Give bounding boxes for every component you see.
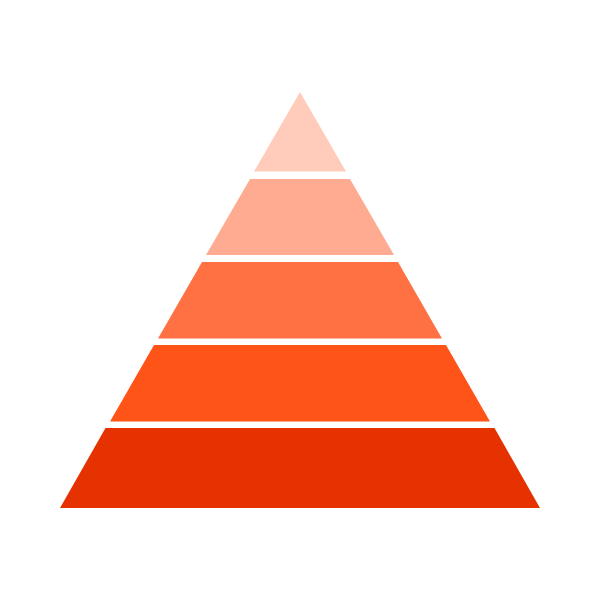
pyramid tier 2 xyxy=(206,179,394,255)
pyramid tier 5: base xyxy=(60,428,540,508)
pyramid tier 4 xyxy=(110,345,490,422)
pyramid tier 3 xyxy=(158,262,442,338)
pyramid tier 1: top xyxy=(254,92,346,172)
